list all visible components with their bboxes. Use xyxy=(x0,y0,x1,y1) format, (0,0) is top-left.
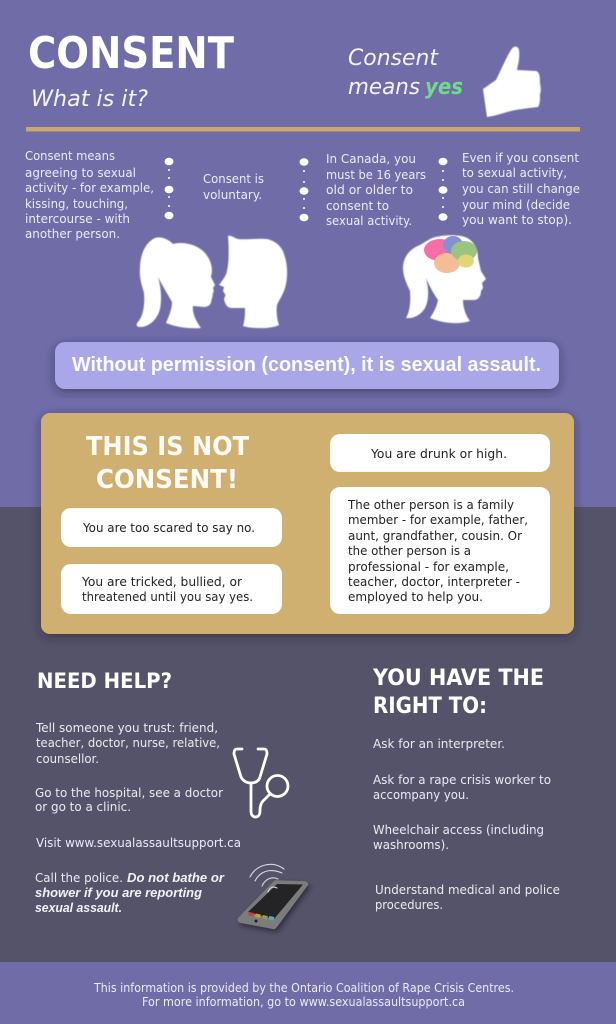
text: need help list: sexual assault. xyxy=(35,900,122,915)
signal arcs xyxy=(250,864,284,892)
text: rights list: accompany you. xyxy=(373,788,469,802)
text: need help list: teacher, doctor, nurse, relative, xyxy=(36,736,220,750)
text: age of consent: sexual activity. xyxy=(326,214,412,228)
panel: this is not consent xyxy=(41,413,574,634)
text: definition of consent: agreeing to sexual xyxy=(25,166,136,180)
text: definition of consent: activity - for example, xyxy=(25,181,154,195)
text: definition of consent: Consent means xyxy=(25,149,115,163)
tagline: consent means yes: Consent xyxy=(348,46,439,71)
icon: two head silhouettes xyxy=(137,236,287,328)
text: need help list: shower if you are reporting xyxy=(35,885,202,900)
heading: you have the right to: YOU HAVE THE xyxy=(372,666,544,691)
brain blobs xyxy=(424,236,477,273)
callout: without permission: Without permission (consent), it is sexual assault. xyxy=(72,354,541,376)
card: family or professional xyxy=(330,487,550,614)
card: drunk or high xyxy=(330,434,550,472)
text: change your mind: to sexual activity, xyxy=(462,166,567,180)
card: family or professional: employed to help you. xyxy=(348,590,483,604)
text: need help list: Visit www.sexualassaultsupport.ca xyxy=(36,836,241,850)
card: tricked: You are tricked, bullied, or xyxy=(81,575,242,589)
text: age of consent: In Canada, you xyxy=(326,152,416,166)
text: need help list: Do not bathe or xyxy=(127,870,225,885)
icon: thumbs up xyxy=(483,47,541,117)
text: need help list: counsellor. xyxy=(36,752,99,766)
tagline: consent means yes xyxy=(348,46,463,100)
text: rights list: washrooms). xyxy=(373,838,449,852)
text: age of consent: must be 16 years xyxy=(326,168,426,182)
text: definition of consent: intercourse - with xyxy=(25,212,130,226)
heading xyxy=(86,432,249,495)
card: too scared xyxy=(61,508,282,547)
text: voluntary xyxy=(203,172,264,202)
card: family or professional: the other person is a xyxy=(348,544,471,558)
title: CONSENT xyxy=(28,28,234,79)
text: age of consent: consent to xyxy=(326,199,389,213)
callout: without permission xyxy=(55,342,559,389)
card: family or professional: aunt, grandfather, cousin. Or xyxy=(348,529,522,543)
text: rights list: Understand medical and police xyxy=(375,883,560,897)
card: tricked: threatened until you say yes. xyxy=(82,590,253,604)
text: voluntary: Consent is xyxy=(203,172,264,186)
heading: CONSENT! xyxy=(96,465,238,495)
text: change your mind: you want to stop). xyxy=(462,213,572,227)
text: change your mind xyxy=(462,151,580,227)
text: need help list: or go to a clinic. xyxy=(35,800,131,814)
text: need help list: Call the police. xyxy=(35,871,123,885)
text: need help list xyxy=(35,721,241,915)
card: drunk or high: You are drunk or high. xyxy=(370,447,507,461)
footer: This information is provided by the Ontario Coalition of Rape Crisis Centres. xyxy=(93,981,514,995)
card: family or professional: teacher, doctor, interpreter - xyxy=(348,575,520,589)
tagline: consent means yes: yes xyxy=(425,75,463,100)
text: rights list: Ask for a rape crisis worker to xyxy=(373,773,551,787)
card: too scared: You are too scared to say no. xyxy=(82,521,255,535)
heading: need help: NEED HELP? xyxy=(37,669,172,693)
text: change your mind: your mind (decide xyxy=(462,198,570,212)
text: rights list: Ask for an interpreter. xyxy=(373,737,505,751)
text: age of consent xyxy=(326,152,426,228)
heading: THIS IS NOT xyxy=(86,432,249,462)
text: rights list: Wheelchair access (including xyxy=(373,823,544,837)
footer xyxy=(0,962,616,1024)
text: rights list: procedures. xyxy=(375,898,443,912)
text: definition of consent xyxy=(25,149,154,241)
text: rights list xyxy=(373,737,560,912)
tagline: consent means yes: means xyxy=(348,75,420,100)
card: family or professional: The other person is a family xyxy=(347,498,514,512)
text: definition of consent: another person. xyxy=(25,227,120,241)
footer: For more information, go to www.sexualassaultsupport.ca xyxy=(142,995,465,1009)
text: voluntary: voluntary. xyxy=(203,188,262,202)
subtitle: What is it? xyxy=(31,87,148,112)
icon: head with colourful brain xyxy=(403,235,486,323)
card: tricked xyxy=(61,564,282,614)
dots: column 2 xyxy=(300,158,308,221)
text: change your mind: you can still change xyxy=(462,182,580,196)
heading: you have the right to: RIGHT TO: xyxy=(373,694,487,719)
text: definition of consent: kissing, touching, xyxy=(25,197,128,211)
dots: column 1 xyxy=(164,158,174,219)
text: change your mind: Even if you consent xyxy=(462,151,579,165)
icon: phone xyxy=(238,864,307,928)
dots: column 3 xyxy=(438,158,448,221)
text: need help list: Go to the hospital, see a doctor xyxy=(35,786,223,800)
heading: you have the right to xyxy=(372,666,544,719)
card: family or professional: professional - for example, xyxy=(348,560,509,574)
text: age of consent: old or older to xyxy=(326,183,413,197)
card: family or professional: member - for example, father, xyxy=(348,513,528,527)
text: need help list: Tell someone you trust: friend, xyxy=(35,721,218,735)
icon: stethoscope xyxy=(234,749,288,817)
